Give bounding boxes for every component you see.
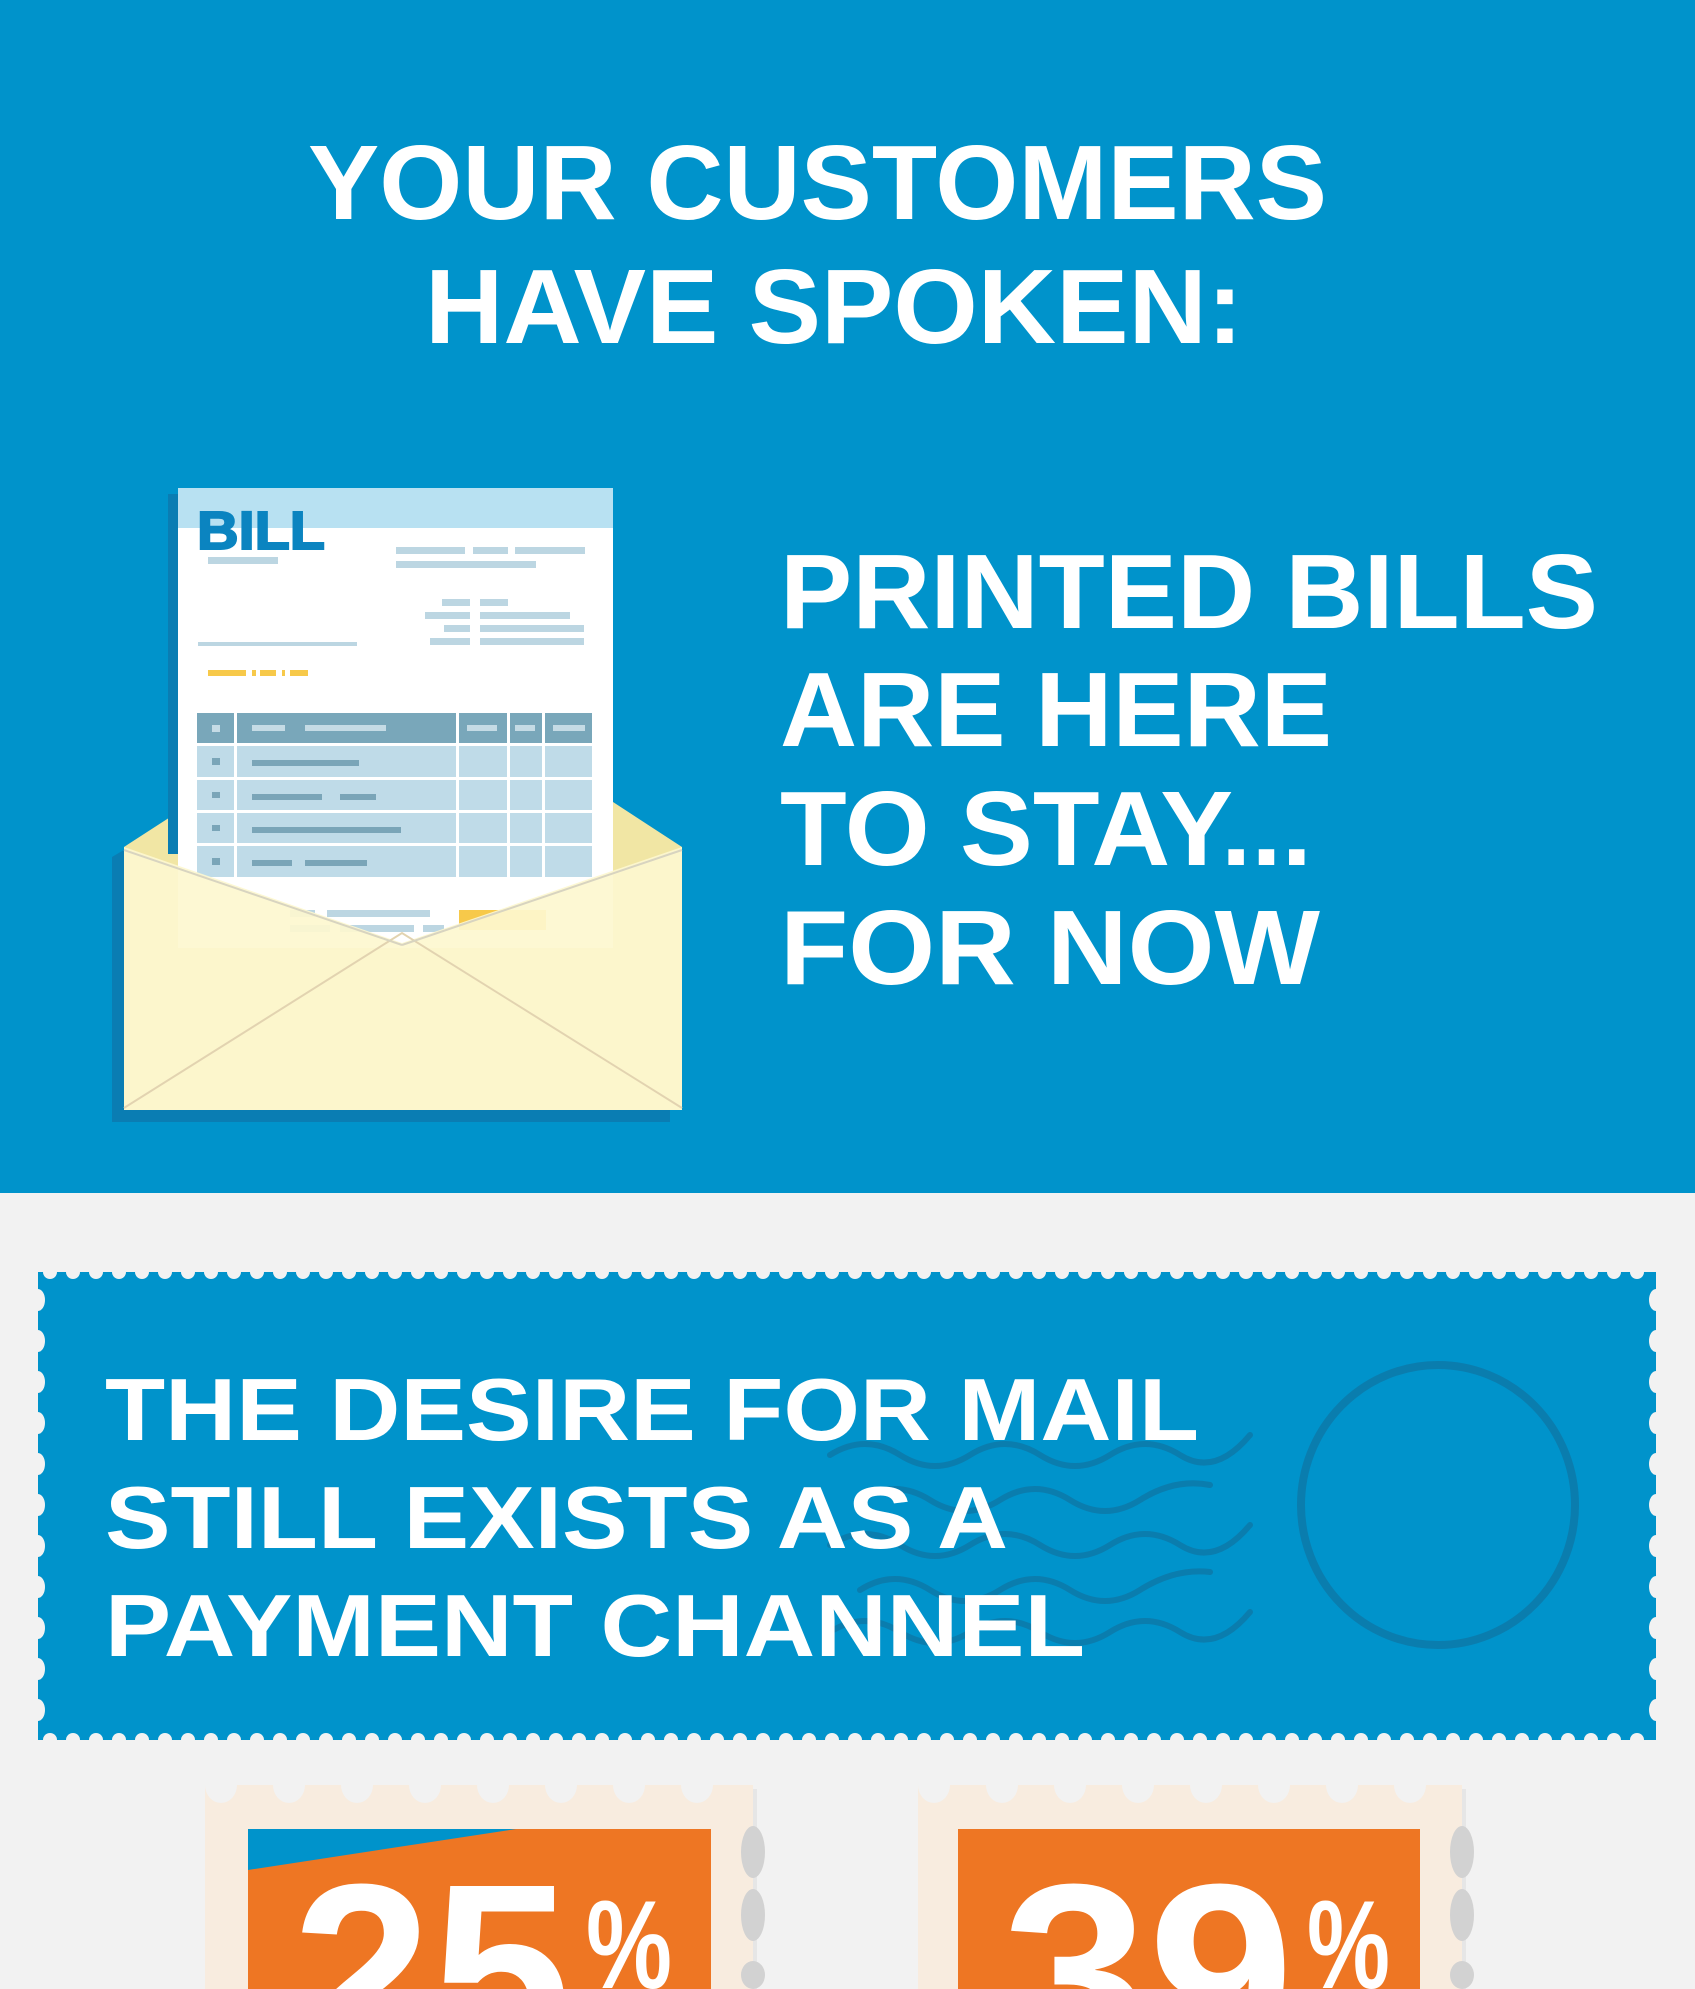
- stamp: 39%: [918, 1767, 1474, 1989]
- banner text: STILL EXISTS AS A: [105, 1468, 1008, 1567]
- headline right: PRINTED BILLS: [780, 533, 1598, 651]
- title: HAVE SPOKEN:: [425, 248, 1243, 366]
- icon: postmark waves: [830, 1435, 1250, 1643]
- top blue section: [0, 0, 1695, 1193]
- headline right: FOR NOW: [780, 889, 1320, 1007]
- banner: stamp: [31, 1265, 1663, 1747]
- icon: postmark circle: [1301, 1365, 1575, 1645]
- illustration: bill in envelope: [112, 488, 682, 1122]
- stamp: 25%: [205, 1767, 765, 1989]
- bill table: [197, 713, 592, 877]
- envelope front pocket: [124, 847, 682, 1110]
- banner text: THE DESIRE FOR MAIL: [105, 1360, 1199, 1459]
- bill paper: [178, 488, 613, 948]
- headline right: TO STAY...: [780, 770, 1312, 888]
- envelope back: [124, 802, 682, 1110]
- banner text: [105, 1360, 1199, 1675]
- headline right: [780, 533, 1598, 1007]
- envelope shadow: [112, 815, 670, 1122]
- bill paper: BILL: [197, 501, 325, 561]
- paper shadow: [168, 494, 180, 854]
- title: [308, 124, 1327, 366]
- headline right: ARE HERE: [780, 651, 1332, 769]
- title: YOUR CUSTOMERS: [308, 124, 1327, 242]
- banner text: PAYMENT CHANNEL: [105, 1576, 1085, 1675]
